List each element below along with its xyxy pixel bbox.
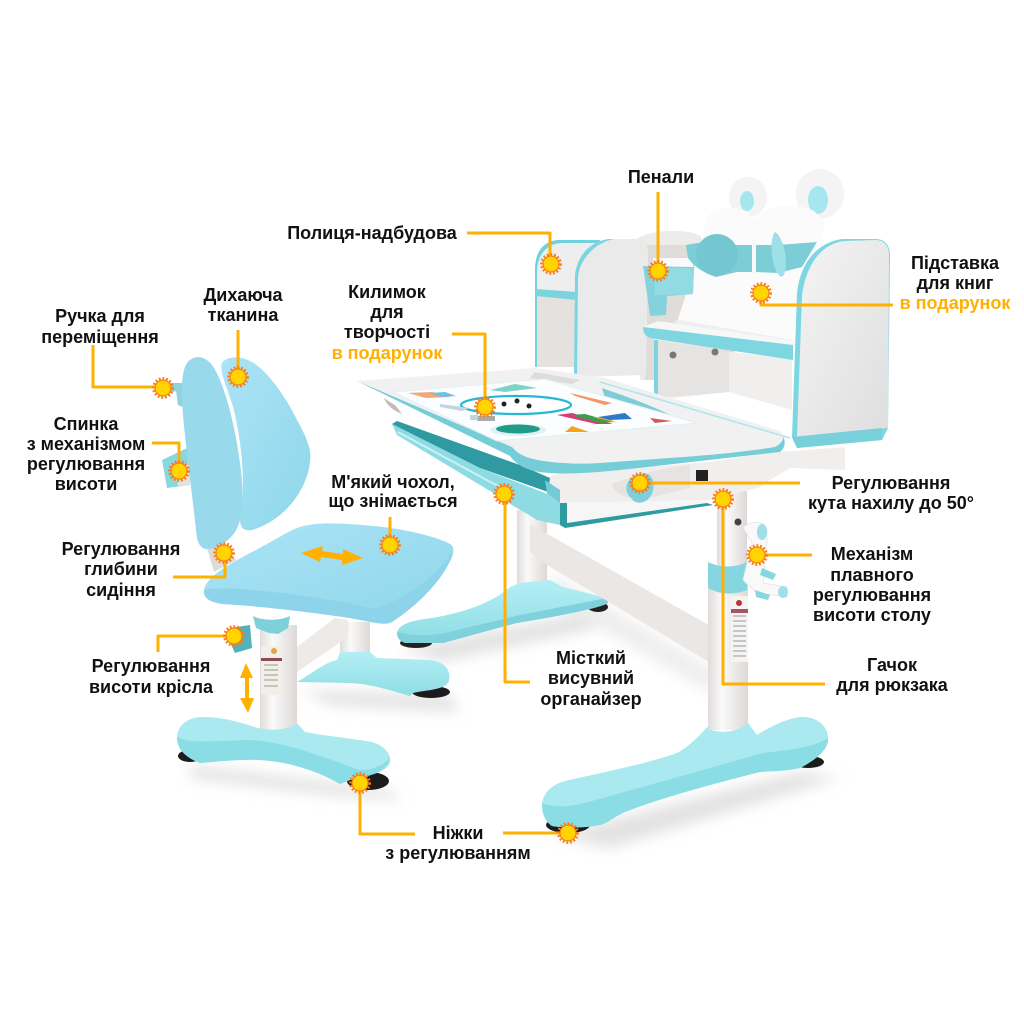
marker: organiser	[494, 484, 514, 504]
label: tilt	[808, 473, 974, 513]
book stand	[673, 206, 825, 343]
label: height mechanism: плавного	[830, 565, 914, 585]
label: cover: М'який чохол,	[331, 472, 455, 492]
backrest rear cushion	[221, 357, 310, 530]
lower compartment	[654, 338, 792, 410]
shelf right panel	[792, 239, 890, 448]
label: book stand: в подарунок	[900, 293, 1011, 313]
label: organiser: органайзер	[540, 689, 642, 709]
chair base front	[177, 616, 390, 790]
label: book stand: для книг	[917, 273, 994, 293]
label: hook	[836, 655, 949, 695]
marker: chair height	[224, 626, 244, 646]
label: book stand: Підставка	[911, 253, 1000, 273]
marker: pencil holder	[648, 261, 668, 281]
label: shelf: Полиця-надбудова	[287, 223, 458, 243]
adjustment knob	[626, 473, 654, 503]
label: backrest: висоти	[55, 474, 117, 494]
strap with clips	[686, 232, 817, 277]
shelf left panel	[535, 240, 600, 367]
label: tilt: кута нахилу до 50°	[808, 493, 974, 513]
chair backrest	[182, 357, 310, 572]
label: fabric: тканина	[208, 305, 279, 325]
desk crank handle	[734, 518, 788, 600]
marker: handle	[153, 378, 173, 398]
marker: tilt knob	[630, 473, 650, 493]
desktop	[357, 368, 790, 473]
label: book stand	[900, 253, 1011, 313]
label: backrest: Спинка	[54, 414, 119, 434]
label: tilt: Регулювання	[832, 473, 950, 493]
label: height mechanism	[813, 544, 931, 625]
leader lines	[93, 192, 893, 834]
label: chair height: висоти крісла	[89, 677, 214, 697]
label: pencil cases: Пенали	[628, 167, 694, 187]
chair height arrow	[240, 663, 254, 713]
label: chair height: Регулювання	[92, 656, 210, 676]
label: fabric: Дихаюча	[203, 285, 284, 305]
label: feet: Ніжки	[433, 823, 483, 843]
pencil holder	[643, 258, 694, 316]
label: organiser	[540, 648, 642, 709]
chair height sticker	[261, 646, 282, 695]
label: handle: Ручка для	[55, 306, 145, 326]
label: mat: Килимок	[348, 282, 427, 302]
label: height mechanism: висоти столу	[813, 605, 931, 625]
label: handle	[41, 306, 159, 347]
marker: cover	[380, 535, 400, 555]
chair support bar	[293, 618, 348, 672]
label: hook: Гачок	[867, 655, 918, 675]
label: feet: з регулюванням	[385, 843, 531, 863]
label: height mechanism: регулювання	[813, 585, 931, 605]
label: backrest: з механізмом	[27, 434, 145, 454]
label: seat depth: Регулювання	[62, 539, 180, 559]
label: backrest: регулювання	[27, 454, 145, 474]
shelf second panel	[574, 239, 648, 377]
label: backrest	[27, 414, 145, 494]
shelf back wall	[635, 231, 735, 380]
label: seat depth: глибини	[84, 559, 158, 579]
desk rear leg and base	[397, 510, 608, 648]
label: fabric	[203, 285, 284, 325]
middle shelf board	[643, 321, 795, 360]
label: feet	[385, 823, 531, 863]
drawer organiser	[392, 421, 560, 525]
backrest front cushion	[182, 357, 243, 549]
marker: shelf	[541, 254, 561, 274]
chair knob	[229, 625, 252, 653]
label: height mechanism: Механізм	[831, 544, 913, 564]
label: mat: для	[370, 302, 404, 322]
backrest height bracket	[162, 448, 190, 488]
marker: mat	[475, 397, 495, 417]
label: cover: що знімається	[328, 491, 458, 511]
height chart sticker	[731, 596, 748, 662]
label: organiser: Місткий	[556, 648, 626, 668]
under-desk mechanism	[547, 447, 845, 528]
chair handle	[165, 383, 183, 407]
marker: chair foot	[350, 773, 370, 793]
marker: fabric	[228, 367, 248, 387]
label: chair height	[89, 656, 214, 697]
label: mat	[332, 282, 443, 363]
label: seat depth	[62, 539, 180, 600]
label: mat: творчості	[344, 322, 430, 342]
marker: backrest	[169, 461, 189, 481]
marker: crank	[747, 545, 767, 565]
label: handle: переміщення	[41, 327, 159, 347]
creativity mat	[393, 379, 697, 441]
ears of book stand	[729, 169, 844, 219]
label: organiser: висувний	[548, 668, 634, 688]
marker: hook	[713, 489, 733, 509]
seat depth arrow	[301, 546, 363, 565]
chair seat	[204, 523, 453, 624]
chair base rear	[297, 622, 450, 698]
desk front leg	[542, 490, 828, 833]
marker: seat depth	[214, 543, 234, 563]
floor shadows	[190, 570, 840, 848]
marker: book stand	[751, 283, 771, 303]
label: seat depth: сидіння	[86, 580, 156, 600]
label: mat: в подарунок	[332, 343, 443, 363]
label: cover	[328, 472, 458, 511]
desk crossbar	[530, 524, 712, 664]
marker: desk foot	[558, 823, 578, 843]
label: hook: для рюкзака	[836, 675, 949, 695]
